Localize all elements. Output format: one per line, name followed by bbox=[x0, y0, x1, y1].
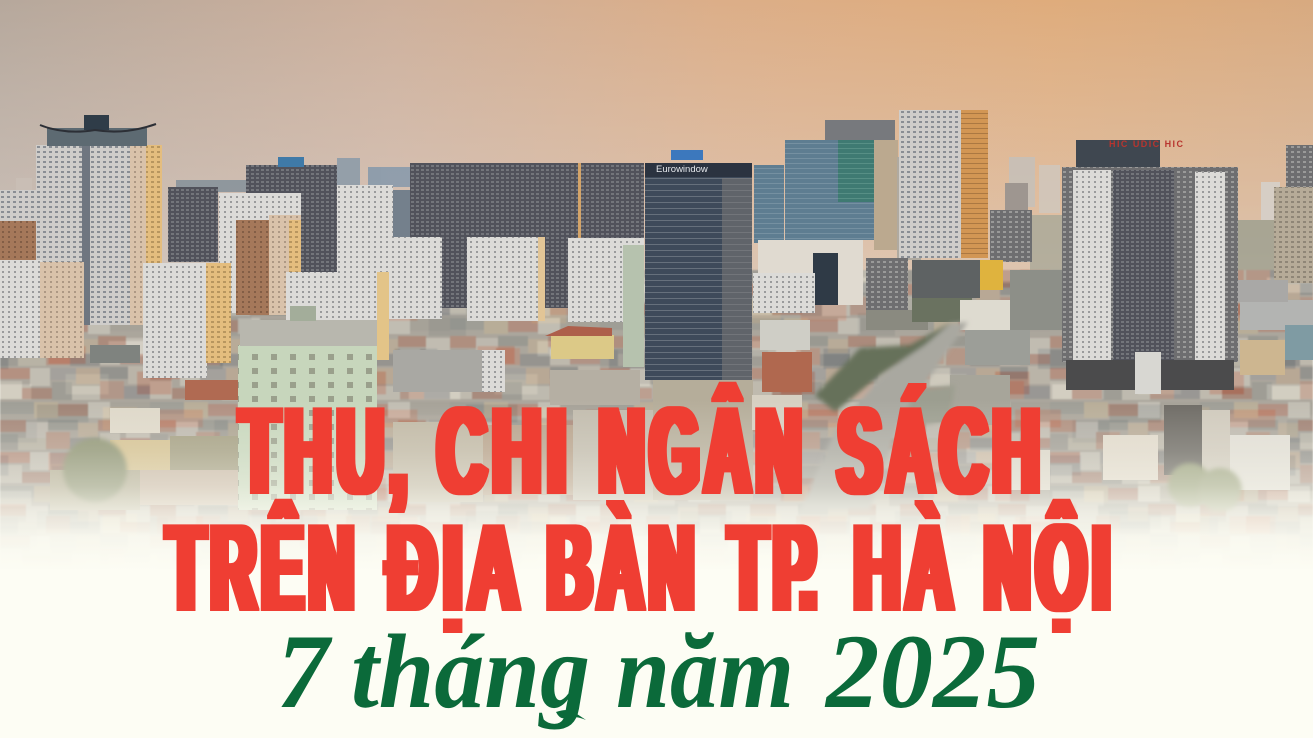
tower with crown, left bbox=[36, 115, 162, 325]
sky background bbox=[0, 0, 1313, 340]
pale green building bbox=[238, 306, 377, 510]
rooftop UDIC sign: HIC UDIC HIC bbox=[1109, 139, 1184, 149]
low-rise city blocks bbox=[50, 280, 1313, 510]
subtitle: tháng bbox=[351, 613, 590, 730]
title line 2: ĐỊA bbox=[387, 500, 525, 637]
distant skyline bbox=[16, 157, 1280, 285]
subtitle bbox=[277, 613, 1040, 730]
Eurowindow tower bbox=[645, 150, 752, 380]
title line 2: TRÊN bbox=[167, 499, 360, 637]
rooftop BIDV sign bbox=[671, 150, 703, 160]
title line 2: BÀN bbox=[547, 500, 700, 637]
mid-rise block with white end bbox=[393, 326, 614, 392]
city ground: low-rise rooftops bbox=[0, 270, 1313, 570]
title line 1: THU, bbox=[240, 383, 413, 520]
title line 2: TP. bbox=[729, 500, 823, 637]
large tower, right bbox=[1062, 139, 1238, 394]
subtitle: 7 bbox=[277, 613, 333, 730]
cream fade into page background bbox=[0, 400, 1313, 738]
low-rise front buildings, centre right bbox=[753, 240, 1062, 330]
subtitle: năm bbox=[616, 613, 794, 730]
title line 1: NGÂN bbox=[599, 382, 807, 520]
title line 1: SÁCH bbox=[838, 383, 1046, 520]
Eurowindow sign: Eurowindow bbox=[656, 164, 708, 175]
title line 2: NỘI bbox=[984, 499, 1116, 637]
title line 1: CHI bbox=[438, 383, 572, 520]
title line 2: HÀ bbox=[854, 500, 958, 637]
boulevard with trees bbox=[63, 322, 1242, 512]
title line 2 bbox=[167, 499, 1116, 637]
title line 1 bbox=[240, 382, 1046, 520]
high-rise towers: back row bbox=[0, 110, 1313, 308]
mid-height apartment blocks bbox=[0, 193, 644, 378]
subtitle: 2025 bbox=[824, 613, 1040, 730]
title bbox=[167, 382, 1116, 637]
